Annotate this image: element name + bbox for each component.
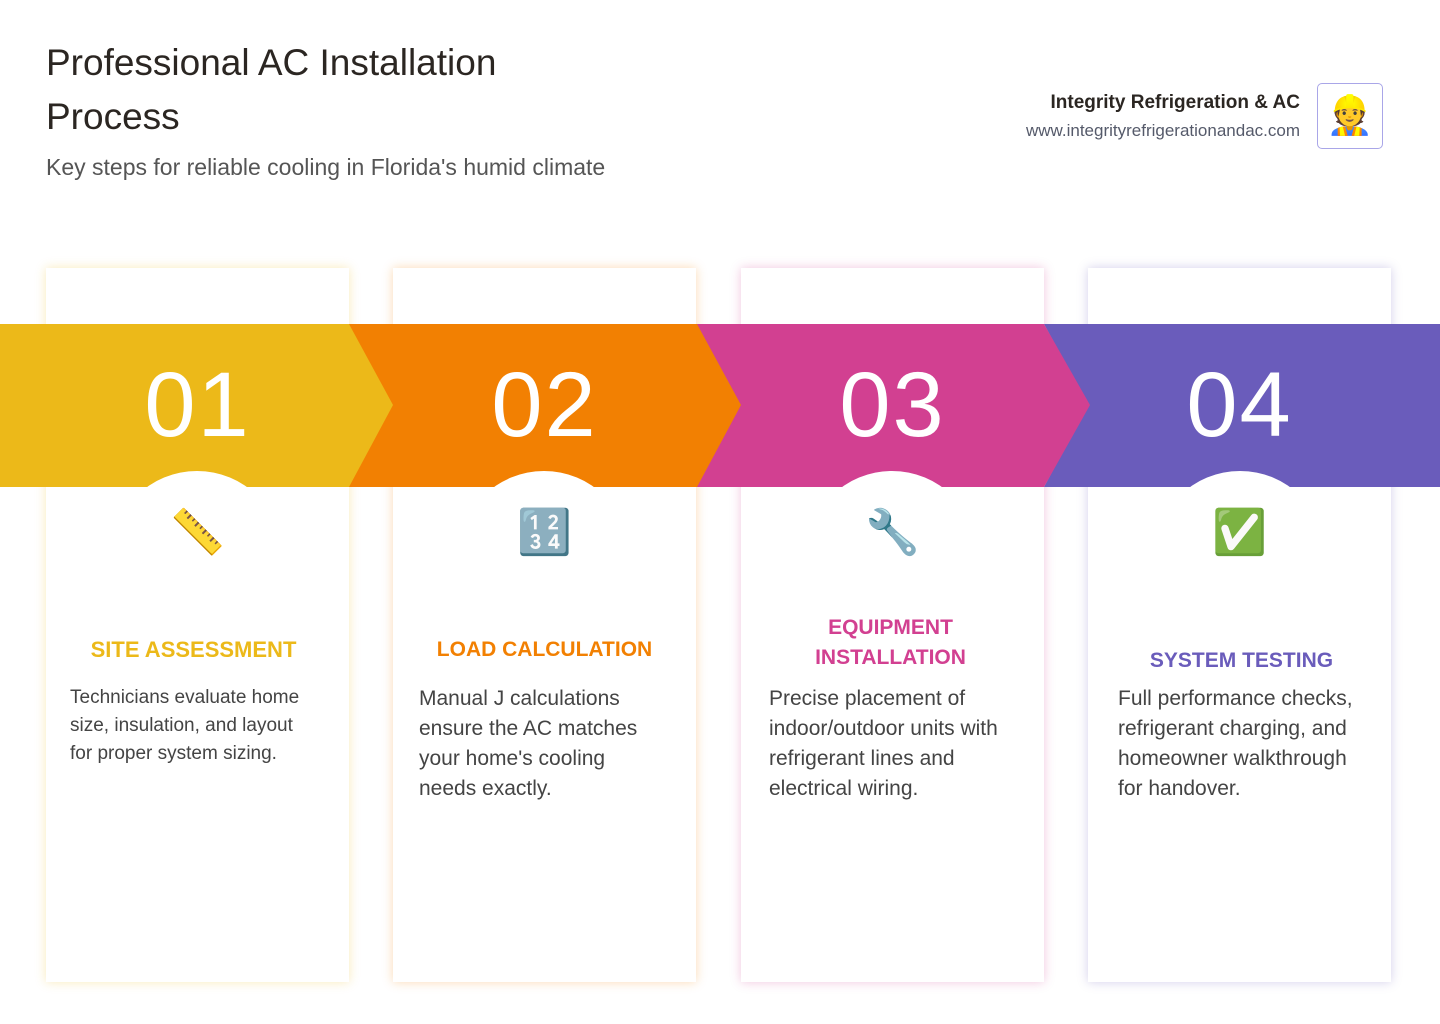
heading 3 [815, 616, 966, 669]
number 03: 03 [839, 354, 946, 456]
text 1: Technicians evaluate home size, insulation, and layout for proper system sizing. [70, 687, 299, 764]
segment 2 [349, 324, 741, 487]
subtitle: Key steps for reliable cooling in Florida's humid climate [46, 154, 605, 180]
logo: 👷 [1326, 95, 1374, 137]
segment 4 [1044, 324, 1440, 487]
text 4: Full performance checks, refrigerant charging, and homeowner walkthrough for handover. [1118, 687, 1353, 800]
title: Process [46, 96, 180, 137]
number 02: 02 [491, 354, 598, 456]
heading 4: SYSTEM TESTING [1150, 649, 1333, 672]
segment 1 [0, 324, 393, 487]
text 3: Precise placement of indoor/outdoor units with refrigerant lines and electrical wiring. [769, 687, 998, 800]
text 2: Manual J calculations ensure the AC matches your home's cooling needs exactly. [419, 687, 637, 800]
number 01: 01 [144, 354, 251, 456]
circles [111, 471, 1326, 643]
logo [1317, 83, 1383, 149]
segment 3 [697, 324, 1090, 487]
icon ruler: 📏 [170, 508, 225, 557]
heading 1: SITE ASSESSMENT [91, 637, 296, 662]
card 2 [393, 268, 696, 982]
heading 3: EQUIPMENT [828, 616, 953, 639]
heading 3: INSTALLATION [815, 646, 966, 669]
icon numbers: 🔢 [517, 508, 572, 557]
number 04: 04 [1186, 354, 1293, 456]
brand name: Integrity Refrigeration & AC [1050, 92, 1300, 113]
heading 2: LOAD CALCULATION [437, 638, 652, 661]
card 1 [46, 268, 349, 982]
brand block [1026, 83, 1383, 149]
title: Professional AC Installation [46, 42, 496, 83]
title [46, 42, 496, 137]
card 3 [741, 268, 1044, 982]
brand url: www.integrityrefrigerationandac.com [1026, 121, 1300, 140]
card 4 [1088, 268, 1391, 982]
icon check: ✅ [1212, 508, 1267, 557]
icon wrench: 🔧 [865, 508, 920, 557]
